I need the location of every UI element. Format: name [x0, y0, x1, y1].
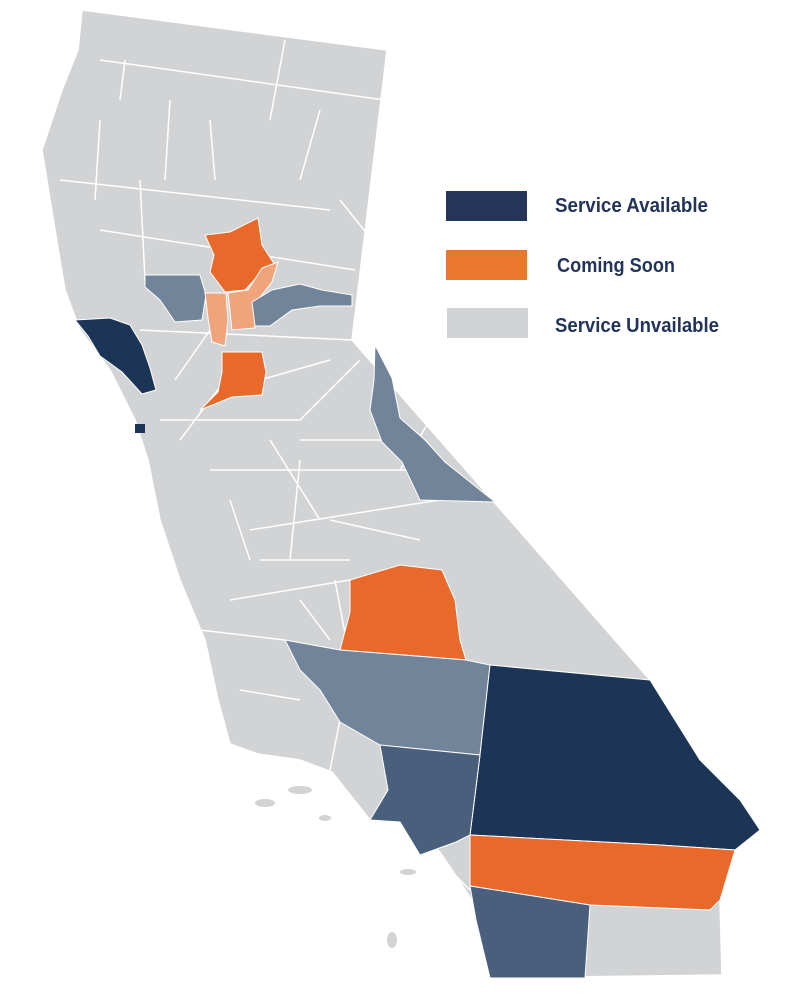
county: Kern — [285, 640, 490, 755]
county lines — [60, 40, 470, 890]
legend: service available — [446, 191, 708, 221]
islands — [255, 786, 416, 948]
county: Colusa — [145, 275, 206, 322]
legend: service unavailable: Service Unvailable — [555, 315, 719, 337]
county: Sutter — [205, 293, 228, 346]
county: Butte — [205, 218, 275, 292]
county: Mono — [370, 345, 495, 502]
county: Riverside — [470, 835, 735, 910]
legend: coming soon — [446, 250, 675, 280]
legend: coming soon: Coming Soon — [557, 255, 675, 277]
county: Sacramento — [200, 352, 266, 410]
county: Los Angeles — [370, 745, 480, 855]
legend — [446, 191, 719, 338]
county: Tulare — [340, 565, 466, 660]
county: Sonoma — [75, 318, 156, 394]
legend: service unavailable — [447, 308, 719, 338]
county: San Diego — [470, 886, 590, 978]
county: San Bernardino — [470, 665, 760, 850]
legend: service available: Service Available — [555, 195, 708, 217]
county: San Francisco — [135, 424, 145, 433]
county: Yuba — [228, 262, 278, 330]
county: Placer/Nevada — [252, 284, 352, 326]
